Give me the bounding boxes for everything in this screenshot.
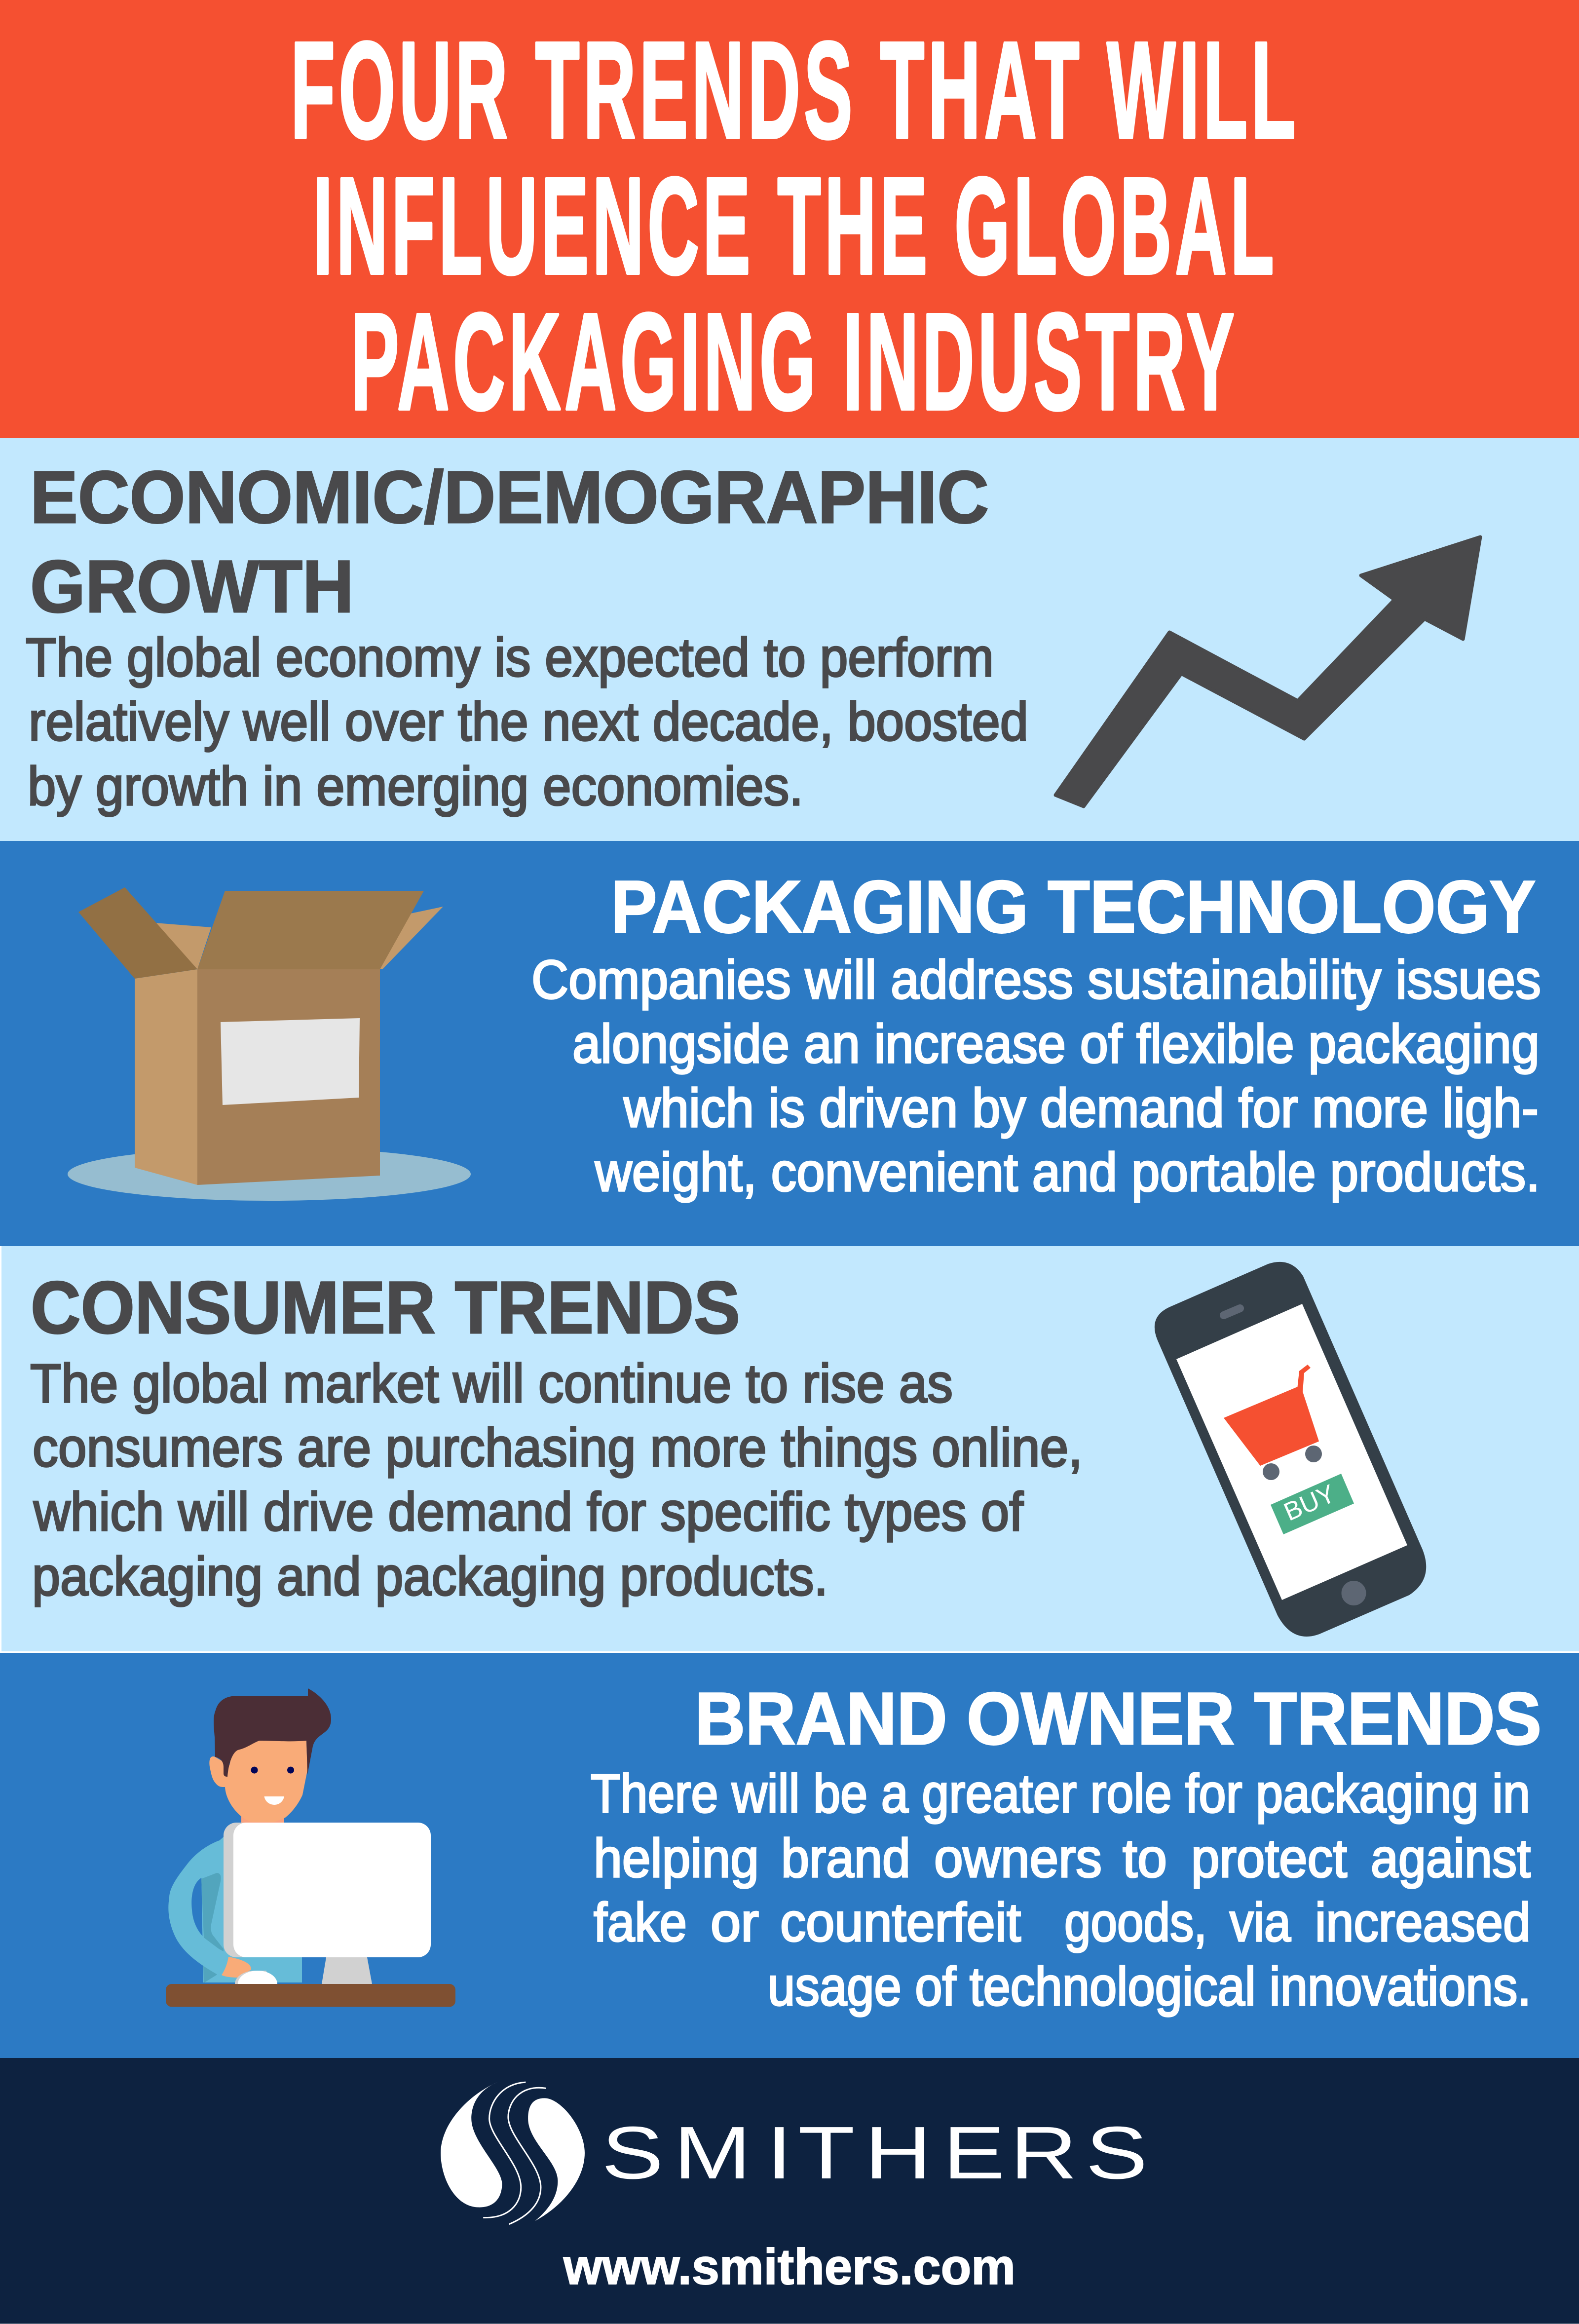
text block: brand owner trends description: counterfeit — [780, 1892, 1021, 1953]
heading: economic/demographic growth — [30, 456, 989, 628]
text block: brand owner trends description: protect — [1191, 1828, 1347, 1889]
heading: packaging technology: PACKAGING TECHNOLOGY — [611, 865, 1536, 948]
icon: smartphone with shopping cart: BUY — [1280, 1479, 1340, 1527]
logo wordmark: SMITHERS — [602, 2111, 1148, 2195]
text block: packaging technology description — [531, 950, 1541, 1203]
text block: brand owner trends description: goods, — [1064, 1892, 1207, 1953]
text block: packaging technology description: Companies will address sustainability issues — [531, 950, 1541, 1010]
text block: brand owner trends description: brand — [781, 1828, 910, 1889]
text block: consumer trends description — [30, 1353, 1083, 1607]
panel: title banner — [0, 0, 1579, 439]
panel: economic/demographic growth — [0, 438, 1579, 841]
text block: brand owner trends description: helping — [594, 1828, 759, 1889]
text block: economy description — [26, 627, 1028, 817]
text block: consumer trends description: The global market will continue to rise as — [30, 1353, 953, 1414]
icon: Smithers logo mark — [441, 2082, 585, 2224]
heading: economic/demographic growth: GROWTH — [30, 545, 354, 628]
text block: brand owner trends description — [591, 1763, 1531, 2017]
illustration: person at computer — [166, 1688, 455, 2007]
panel: footer — [0, 2058, 1579, 2324]
panel: brand owner trends — [0, 1653, 1579, 2058]
text block: brand owner trends description: against — [1371, 1828, 1531, 1889]
text block: brand owner trends description: owners — [934, 1828, 1102, 1889]
icon: rising arrow — [1055, 537, 1480, 806]
text block: brand owner trends description: increased — [1315, 1892, 1531, 1953]
text block: economy description: relatively well over the next decade, boosted — [29, 691, 1028, 752]
heading: economic/demographic growth: ECONOMIC/DEMOGRAPHIC — [30, 456, 989, 538]
panel: packaging technology — [0, 841, 1579, 1246]
website url: www.smithers.com — [563, 2239, 1015, 2295]
text block: consumer trends description: packaging and packaging products. — [32, 1546, 828, 1607]
icon: cardboard box — [68, 887, 471, 1201]
heading: brand owner trends: BRAND OWNER TRENDS — [695, 1677, 1541, 1760]
icon: smartphone with shopping cart — [1155, 1262, 1426, 1637]
text block: brand owner trends description: fake — [594, 1892, 687, 1953]
text block: packaging technology description: which is driven by demand for more ligh- — [623, 1078, 1539, 1139]
text block: brand owner trends description: via — [1230, 1892, 1291, 1953]
text block: consumer trends description: consumers are purchasing more things online, — [33, 1417, 1083, 1478]
text block: consumer trends description: which will drive demand for specific types of — [33, 1482, 1023, 1542]
text block: packaging technology description: weight, convenient and portable products. — [595, 1142, 1540, 1203]
text block: economy description: The global economy is expected to perform — [26, 627, 994, 688]
title — [291, 13, 1299, 439]
text block: economy description: by growth in emerging economies. — [28, 756, 803, 817]
heading: consumer trends: CONSUMER TRENDS — [31, 1266, 740, 1349]
panel: consumer trends — [1, 1246, 1579, 1651]
text block: brand owner trends description: to — [1123, 1828, 1167, 1889]
text block: brand owner trends description: or — [711, 1892, 759, 1953]
text block: packaging technology description: alongside an increase of flexible packaging — [572, 1014, 1540, 1074]
